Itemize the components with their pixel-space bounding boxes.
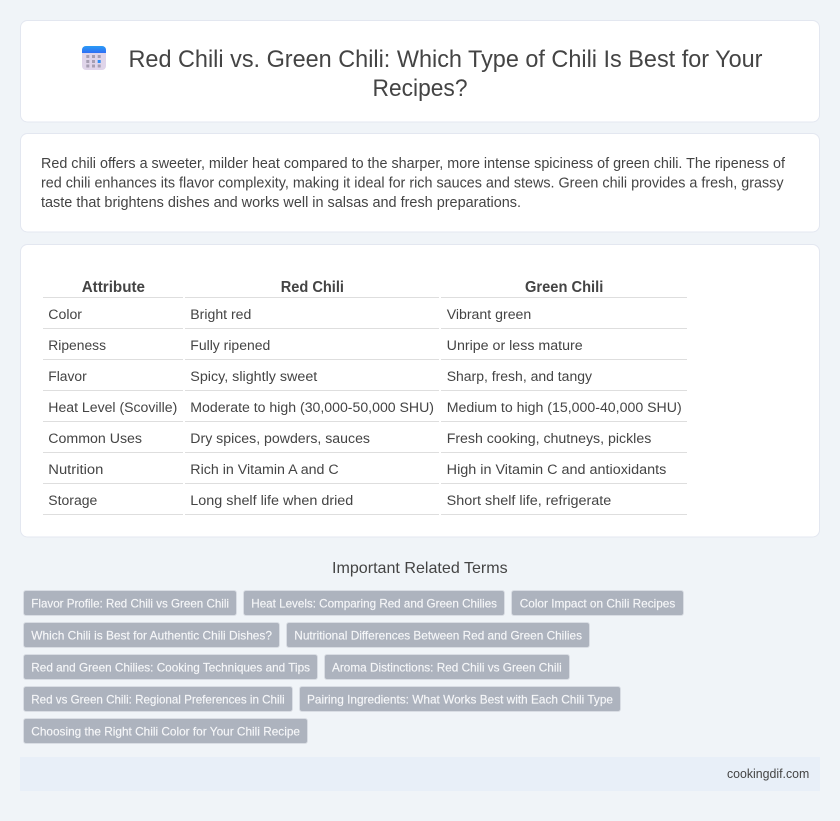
text block: summary: red chili enhances its flavor complexity, making it ideal for rich sauces and stews. Green chili provides a fresh, grassy: [41, 176, 784, 192]
table row: nutrition: High in Vitamin C and antioxidants: [447, 462, 666, 478]
text block: summary: Red chili offers a sweeter, milder heat compared to the sharper, more intense spiciness of green chili. The ripeness of: [41, 156, 786, 172]
tag: Nutritional Differences Between Red and Green Chilies: [294, 628, 582, 642]
tag: [512, 590, 684, 616]
tag: Choosing the Right Chili Color for Your Chili Recipe: [31, 724, 300, 738]
table row: common uses: Dry spices, powders, sauces: [190, 431, 370, 447]
tag: [24, 654, 318, 680]
title: Red Chili vs. Green Chili: Which Type of Chili Is Best for Your: [128, 46, 762, 73]
heading: important related terms: Important Related Terms: [332, 560, 508, 577]
footer bar: [20, 757, 820, 791]
tag: Which Chili is Best for Authentic Chili Dishes?: [31, 628, 272, 642]
table row: flavor: Spicy, slightly sweet: [190, 369, 317, 385]
table row: ripeness: Unripe or less mature: [447, 338, 583, 354]
tag: Aroma Distinctions: Red Chili vs Green Chili: [332, 660, 562, 674]
table row: ripeness: Fully ripened: [190, 338, 270, 354]
table row: storage: Storage: [48, 493, 97, 509]
table row: common uses: [48, 431, 651, 447]
tag: Flavor Profile: Red Chili vs Green Chili: [31, 596, 229, 610]
table row: flavor: Flavor: [48, 369, 87, 385]
icon: calendar: [82, 46, 106, 70]
table header row: Red Chili: [281, 279, 344, 296]
table row: color: Vibrant green: [447, 307, 531, 323]
related term tags: [24, 590, 684, 744]
tag: [300, 686, 620, 712]
table header row: [82, 279, 603, 296]
table row: common uses: Common Uses: [48, 431, 142, 447]
title: Recipes?: [372, 75, 468, 102]
tag: [24, 718, 308, 744]
table header row: Attribute: [82, 279, 145, 296]
table row: ripeness: [48, 338, 583, 354]
table row: flavor: [48, 369, 593, 385]
tag: Color Impact on Chili Recipes: [520, 596, 675, 610]
table row: nutrition: [48, 462, 666, 478]
table row: color: Color: [48, 307, 82, 323]
table row: nutrition: Nutrition: [48, 462, 103, 478]
tag: [286, 622, 590, 648]
table row: heat level: Moderate to high (30,000-50,000 SHU): [190, 400, 434, 416]
table row: storage: Short shelf life, refrigerate: [447, 493, 611, 509]
tag: Red vs Green Chili: Regional Preferences in Chili: [31, 692, 285, 706]
text block: summary: [41, 156, 786, 211]
table row: color: [48, 307, 531, 323]
table row: nutrition: Rich in Vitamin A and C: [190, 462, 339, 478]
table row: common uses: Fresh cooking, chutneys, pickles: [447, 431, 651, 447]
tag: [244, 590, 504, 616]
panel: summary paragraph: [20, 134, 820, 232]
table row: color: Bright red: [190, 307, 251, 323]
table row: ripeness: Ripeness: [48, 338, 106, 354]
tag: [24, 590, 236, 616]
text block: summary: taste that brightens dishes and works well in salsas and fresh preparations.: [41, 195, 521, 211]
table row: flavor: Sharp, fresh, and tangy: [447, 369, 593, 385]
tag: [24, 622, 280, 648]
tag: Red and Green Chilies: Cooking Techniques and Tips: [31, 660, 310, 674]
panel: comparison table: [20, 244, 820, 537]
tag: [324, 654, 570, 680]
table row: heat level: Heat Level (Scoville): [48, 400, 177, 416]
table row: storage: [48, 493, 611, 509]
table rule lines: [43, 298, 687, 514]
table row: storage: Long shelf life when dried: [190, 493, 353, 509]
table row: heat level: Medium to high (15,000-40,000 SHU): [447, 400, 682, 416]
table header row: Green Chili: [525, 279, 603, 296]
table row: heat level: [48, 400, 682, 416]
tag: [24, 686, 292, 712]
tag: Heat Levels: Comparing Red and Green Chilies: [251, 596, 497, 610]
tag: Pairing Ingredients: What Works Best with Each Chili Type: [307, 692, 613, 706]
footer source text: cookingdif.com: [727, 766, 809, 781]
title: [128, 46, 762, 102]
panel: header: [20, 20, 820, 122]
